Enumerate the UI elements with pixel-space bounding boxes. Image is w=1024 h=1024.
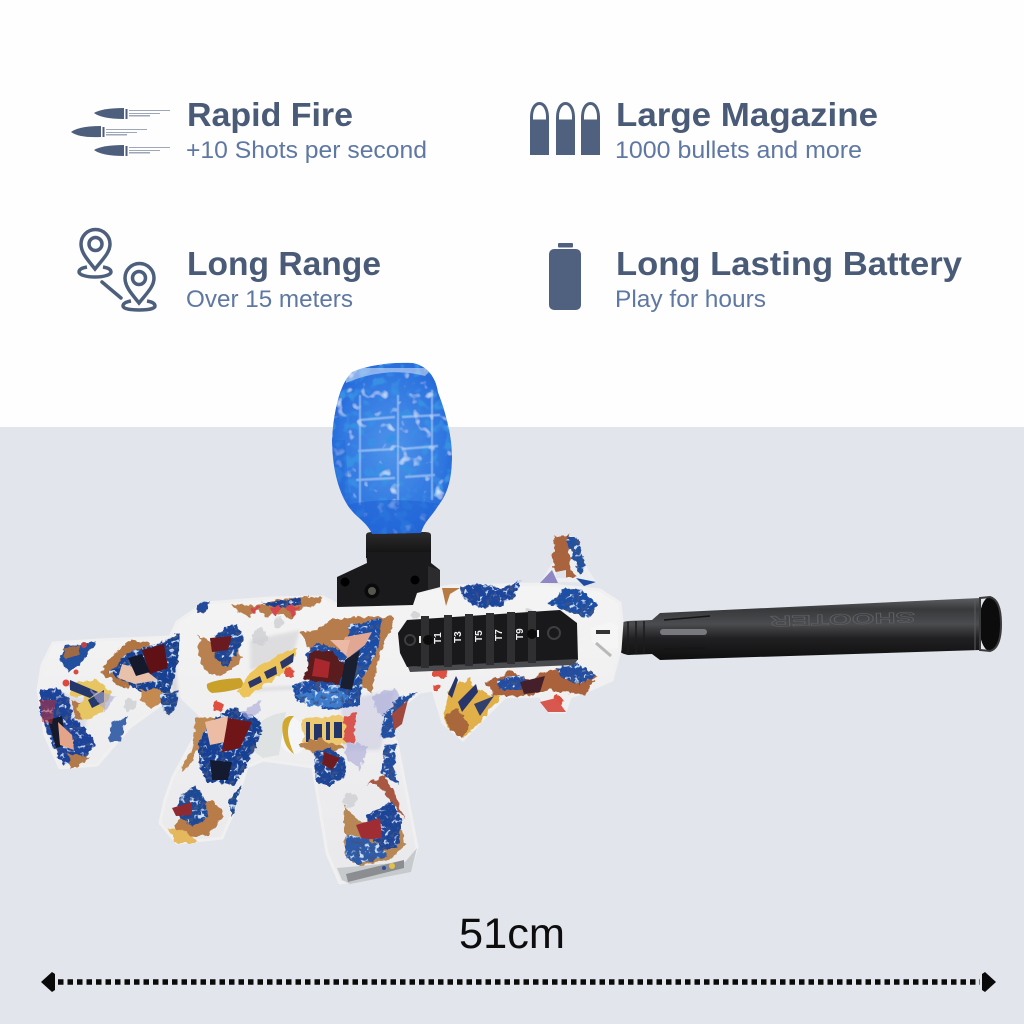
bottle grenade grid [356,390,440,505]
bottle neck darkening [347,500,440,534]
art: magazine upper dino [298,738,346,786]
art: stock top dino [100,632,180,716]
art: trigger graffiti [302,712,356,750]
graffiti dinosaur artwork [40,534,597,884]
art: stock rear dino [40,688,96,770]
feature: rapid fire [71,96,427,164]
art: small dino upper [198,624,243,677]
feature: long range [79,229,381,313]
art: magazine lower dino [344,802,406,866]
feature: large magazine [530,96,878,164]
text: over 15 meters: Over 15 meters [186,286,353,313]
art: handguard rear swirl [380,692,418,738]
suppressor barrel [616,597,1001,660]
art: grip upper dino [180,708,262,785]
art: handguard top [442,581,520,608]
art: foregrip [444,676,500,738]
art: handguard front [548,588,597,618]
dimension: length label: 51cm [459,910,565,958]
art: red splatter [213,665,563,726]
art: lavender splashes [90,688,402,770]
rear gray speckle [124,608,534,807]
feature: battery [549,243,963,313]
bottle mount [337,532,440,607]
art: top teeth [196,597,322,620]
art: yellow banner [238,648,296,698]
rail markings [433,628,526,644]
heading: Large Magazine: Large Magazine [616,96,878,133]
trigger guard opening [279,716,306,754]
rail markings: T1 [433,632,444,644]
body shading [52,630,395,750]
dimension arrow [41,972,996,992]
icon: three bullets [530,102,600,155]
black rail [398,610,578,672]
product: gel blaster [38,363,1001,884]
art: magazine side strip [366,744,404,820]
heading: Long Range: Long Range [187,245,381,282]
gold charging lever [207,678,243,693]
icon: flying bullets [71,108,170,156]
art: stock small dino [60,642,96,671]
rail markings: T3 [453,631,464,643]
heading: Long Lasting Battery: Long Lasting Battery [616,245,963,282]
gold trigger [282,716,294,754]
icon: battery [549,243,581,310]
art: stock graffiti [62,670,128,742]
gun body [38,584,622,883]
art: central large dino [292,616,395,710]
text: shots per second: +10 Shots per second [186,137,427,164]
rail markings: T7 [494,629,505,641]
art: grip lower dino [168,784,242,843]
barrel engraving: SHOOTER [770,608,915,629]
front end detail [590,622,618,656]
icon: two location pins [79,229,155,310]
text: play for hours: Play for hours [615,286,766,313]
heading: Rapid Fire: Rapid Fire [187,96,353,133]
trigger guard shade [245,712,286,758]
front sight [540,534,597,586]
text: bullets and more: 1000 bullets and more [615,137,862,164]
art: under rail [485,664,596,712]
gel ball bottle [332,363,452,536]
rail markings: T5 [474,630,485,642]
magazine base plate [337,848,417,884]
rail markings: T9 [515,628,526,640]
